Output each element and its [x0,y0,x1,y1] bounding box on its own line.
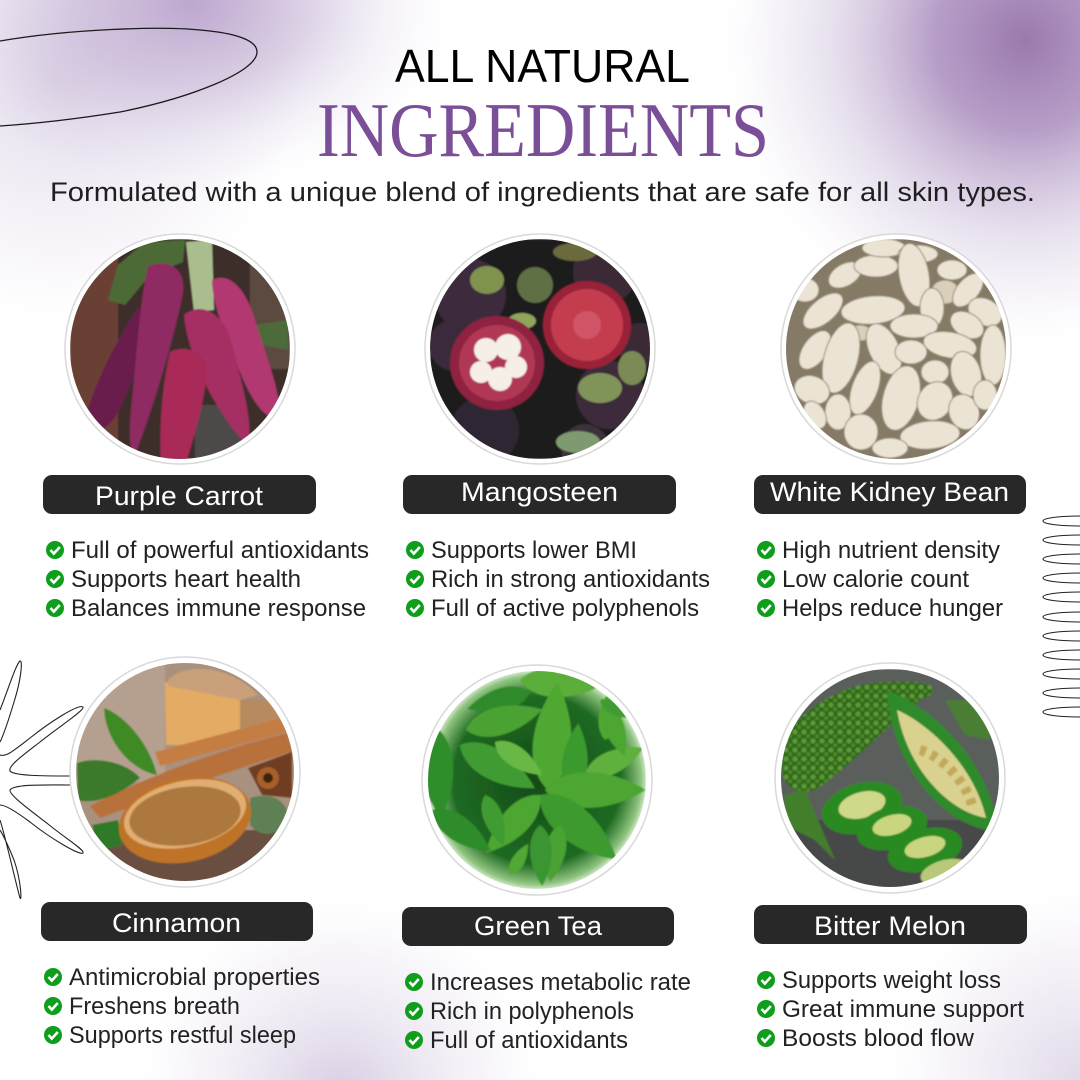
list: Purple Carrot benefits [46,537,369,622]
label: Bitter Melon: Bitter Melon [814,911,966,941]
panel: bitter melon [754,663,1027,1052]
list: Purple Carrot benefits: Balances immune response [71,595,366,622]
decorative starburst left [0,661,83,898]
list: Mangosteen benefits [406,537,710,622]
list: Bitter Melon benefits: Supports weight loss [782,967,1001,994]
panel: mangosteen [403,234,710,622]
list: Cinnamon benefits: Freshens breath [69,993,240,1020]
image: mangosteen fruit [425,234,662,472]
image: bitter melon [775,663,1005,893]
label: Green Tea: Green Tea [474,911,603,941]
label: Mangosteen [403,475,676,514]
list: Mangosteen benefits: Full of active polyphenols [431,595,699,622]
list: Green Tea benefits: Full of antioxidants [430,1027,628,1054]
list: Mangosteen benefits: Supports lower BMI [431,537,637,564]
label: Cinnamon [41,902,313,941]
decorative ellipse line top left [0,28,257,126]
panel: cinnamon [41,657,320,1049]
list: White Kidney Bean benefits [757,537,1003,622]
list: Purple Carrot benefits: Full of powerful antioxidants [71,537,369,564]
list: Cinnamon benefits: Antimicrobial properties [69,964,320,991]
image: cinnamon sticks and powder [70,657,300,887]
label: Bitter Melon [754,905,1027,944]
label: Green Tea [402,907,674,946]
list: Purple Carrot benefits: Supports heart health [71,566,301,593]
list: Green Tea benefits [405,969,691,1054]
panel: green tea [402,665,691,1054]
panel: white kidney bean [754,234,1026,622]
label: Cinnamon: Cinnamon [112,908,241,938]
subtitle: Formulated with a unique blend of ingredients that are safe for all skin types. [50,177,1035,207]
list: Cinnamon benefits [44,964,320,1049]
decorative spring coils right [1043,516,1080,717]
list: White Kidney Bean benefits: High nutrient density [782,537,1000,564]
label: Mangosteen: Mangosteen [461,477,618,507]
label: Purple Carrot: Purple Carrot [95,481,264,511]
list: Bitter Melon benefits [757,967,1024,1052]
label: Purple Carrot [43,475,316,514]
title: All Natural: ALL NATURAL [395,40,690,92]
title: Ingredients: INGREDIENTS [317,87,769,173]
list: Bitter Melon benefits: Boosts blood flow [782,1025,975,1052]
image: green tea leaves [416,665,652,895]
image: purple carrots [65,234,295,464]
image: white kidney beans [781,234,1011,464]
list: Cinnamon benefits: Supports restful sleep [69,1022,296,1049]
list: Bitter Melon benefits: Great immune support [782,996,1024,1023]
panel: purple carrot [43,234,369,622]
label: White Kidney Bean: White Kidney Bean [770,477,1009,507]
list: White Kidney Bean benefits: Low calorie count [782,566,969,593]
list: Green Tea benefits: Rich in polyphenols [430,998,634,1025]
list: Mangosteen benefits: Rich in strong antioxidants [431,566,710,593]
list: Green Tea benefits: Increases metabolic rate [430,969,691,996]
list: White Kidney Bean benefits: Helps reduce hunger [782,595,1003,622]
label: White Kidney Bean [754,475,1026,514]
